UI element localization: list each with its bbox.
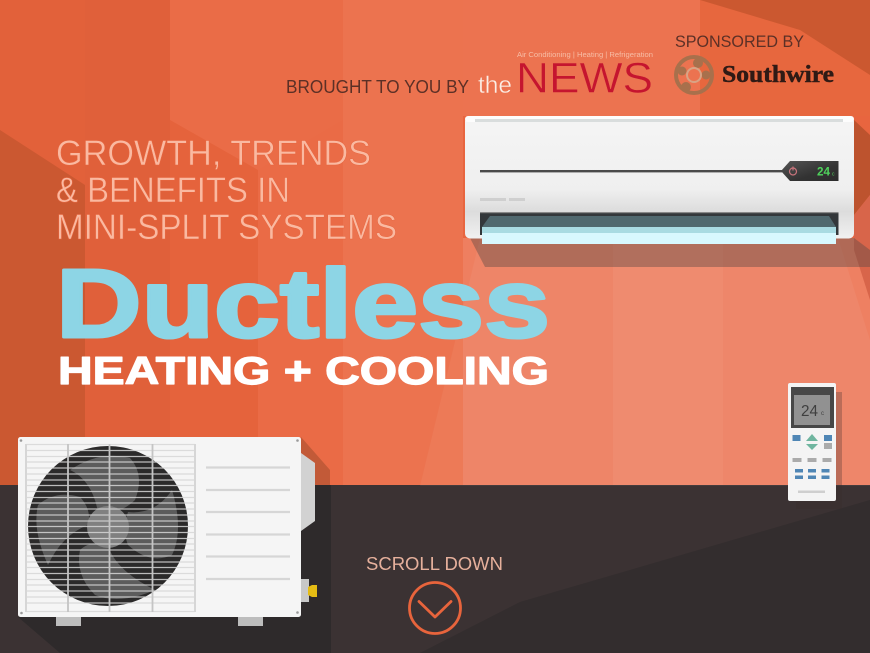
slats (206, 468, 290, 579)
remote shadow (796, 392, 842, 509)
heading (56, 134, 550, 393)
sponsor line: the NEWS (286, 52, 653, 102)
display panel: c (832, 172, 835, 178)
unit shadow (470, 238, 870, 267)
fan (28, 446, 188, 606)
text: the: the (478, 72, 512, 99)
unit body (465, 116, 854, 238)
icon: Southwire logo (676, 57, 712, 93)
air vent (480, 212, 838, 244)
ground (0, 485, 870, 653)
text: tagline: Air Conditioning | Heating | Refrigeration (517, 52, 653, 59)
text: Ductless: Ductless (56, 249, 550, 358)
display panel: 24 (817, 166, 831, 178)
remote top (791, 387, 834, 428)
outdoor shadow (301, 437, 330, 485)
text: subtitle line 3: MINI-SPLIT SYSTEMS (56, 208, 397, 247)
remote control (788, 383, 842, 509)
text: subtitle line 2: & BENEFITS IN (56, 171, 290, 210)
pipe connector (301, 579, 309, 602)
text: Southwire: Southwire (722, 62, 834, 88)
remote body (788, 383, 836, 501)
small bars (480, 198, 506, 201)
screws (20, 439, 299, 614)
background facets (0, 0, 870, 486)
text: remote temp: 24 (801, 403, 818, 420)
grille (26, 444, 195, 612)
cabinet (18, 437, 301, 617)
icon: down chevron (410, 582, 460, 634)
air flow beams (420, 238, 870, 486)
text: sponsored by: SPONSORED BY (675, 32, 804, 51)
text: heating + cooling: HEATING + COOLING (58, 350, 549, 393)
text: brought to you by: BROUGHT TO YOU BY (286, 77, 469, 97)
buttons (792, 434, 832, 493)
sponsor: Southwire (675, 32, 834, 93)
text: subtitle line 1: GROWTH, TRENDS (56, 134, 371, 173)
remote control: c (821, 411, 824, 417)
indoor unit (465, 116, 870, 267)
outdoor unit (18, 437, 331, 653)
feet (56, 617, 81, 626)
display panel (781, 161, 838, 181)
text: scroll down: SCROLL DOWN (366, 553, 503, 574)
remote screen (794, 395, 830, 425)
scroll down (366, 553, 503, 634)
text: NEWS: NEWS (516, 54, 653, 102)
horizontal seam (480, 170, 782, 172)
side housing (301, 453, 315, 531)
